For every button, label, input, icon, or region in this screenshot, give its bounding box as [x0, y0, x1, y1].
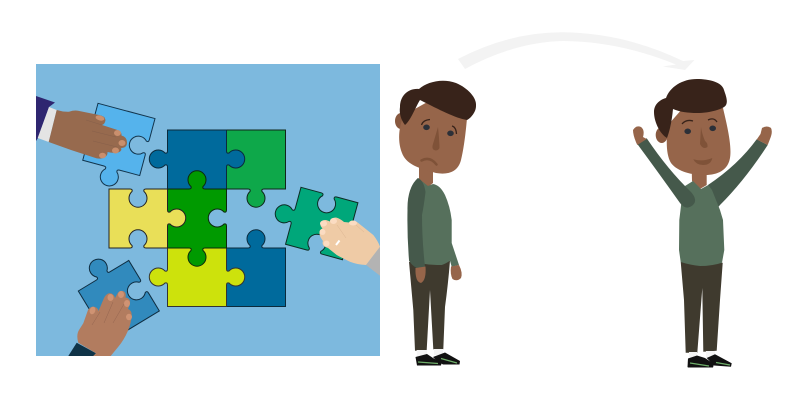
sleeve: [407, 178, 426, 268]
puzzle piece: yellow: [109, 189, 186, 248]
person: sad: [395, 81, 476, 365]
hands: [633, 126, 647, 145]
shoes: [688, 354, 732, 368]
shoes: [416, 352, 460, 366]
puzzle piece: centre green: [168, 171, 226, 266]
puzzle piece: bottom right blue: [226, 230, 286, 306]
ear: [656, 127, 668, 143]
arrow: curved progress: [458, 32, 694, 70]
puzzle piece: top blue: [149, 130, 245, 189]
right arm: [708, 139, 768, 212]
puzzle piece: top green: [226, 130, 286, 207]
socks: [689, 351, 715, 359]
left arm: [637, 138, 695, 208]
shirt: [679, 181, 724, 266]
face: [422, 120, 456, 164]
head: [399, 95, 467, 174]
person: happy: [633, 79, 772, 368]
puzzle piece: loose mid blue: [69, 245, 159, 341]
hand: top left: [36, 96, 127, 159]
face: [682, 119, 717, 165]
puzzle piece: lime: [149, 248, 245, 306]
ear: [395, 113, 407, 129]
hair: [400, 81, 476, 125]
hands: [415, 266, 426, 283]
neck: [692, 168, 707, 189]
head: [667, 100, 730, 175]
puzzle piece: loose teal: [268, 183, 358, 260]
hand: bottom left: [68, 291, 132, 356]
hand: right: [319, 218, 380, 276]
pants: [681, 262, 723, 353]
shirt: [409, 178, 459, 267]
socks: [417, 349, 443, 357]
hair: [654, 79, 727, 138]
neck: [419, 165, 433, 187]
puzzle piece: loose light blue: [78, 103, 155, 193]
pants: [409, 261, 450, 351]
panel: puzzle scene: [36, 64, 380, 356]
